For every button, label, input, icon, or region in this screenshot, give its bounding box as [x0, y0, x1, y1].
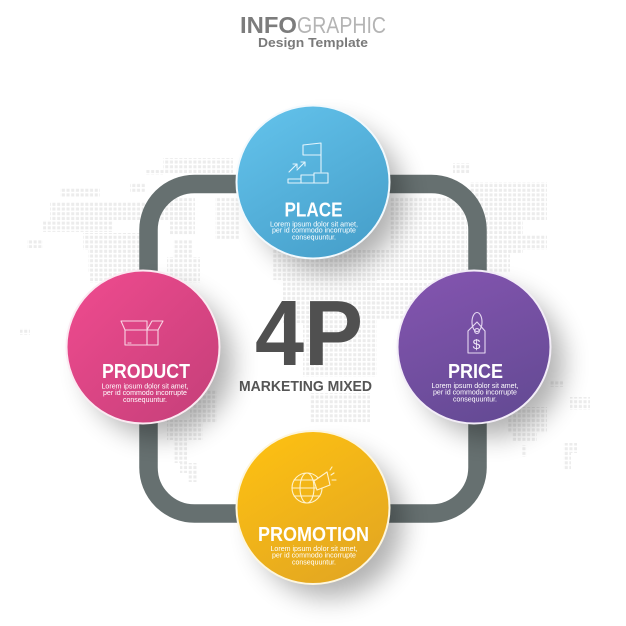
text: price description: per id commodo incorrupte [433, 388, 517, 396]
heading: product: PRODUCT [102, 361, 190, 383]
icon: dollar sign: $ [473, 336, 481, 352]
heading: promotion: PROMOTION [258, 524, 369, 546]
centre heading: 4P: 4P [255, 281, 363, 385]
icon: globe with megaphone [292, 467, 336, 503]
title word: infographic: INFO [240, 12, 297, 38]
text: promotion description: Lorem ipsum dolor sit amet, [270, 544, 358, 553]
panel: promotion [236, 431, 403, 598]
text: place description: consequuntur. [292, 232, 336, 242]
connecting rounded ring [148, 184, 478, 514]
text: product description: Lorem ipsum dolor sit amet, [102, 382, 188, 390]
heading: place: PLACE [284, 200, 342, 222]
text: place description: per id commodo incorrupte [272, 226, 356, 234]
subheading: marketing mixed: MARKETING MIXED [239, 378, 372, 395]
text: product description: consequuntur. [123, 395, 167, 404]
text: product description [102, 382, 188, 404]
title word: graphic: GRAPHIC [297, 12, 386, 38]
text: place description [270, 220, 358, 242]
icon: open box [121, 321, 163, 345]
icon: price tag [468, 312, 485, 353]
text: product description: per id commodo incorrupte [103, 388, 187, 397]
title [240, 12, 386, 50]
text: promotion description [270, 544, 358, 566]
panel: price [398, 270, 564, 437]
dotted world map [20, 158, 590, 482]
text: price description [432, 381, 518, 404]
heading: price: PRICE [448, 361, 503, 383]
text: price description: Lorem ipsum dolor sit amet, [432, 381, 518, 390]
panel: place [236, 106, 403, 272]
text: price description: consequuntur. [453, 394, 497, 404]
panel: product [66, 270, 233, 437]
text: place description: Lorem ipsum dolor sit amet, [270, 220, 358, 228]
text: promotion description: per id commodo incorrupte [272, 550, 356, 560]
text: promotion description: consequuntur. [292, 558, 336, 566]
icon: flag on podium [288, 143, 328, 183]
subtitle: Design Template [258, 35, 368, 50]
